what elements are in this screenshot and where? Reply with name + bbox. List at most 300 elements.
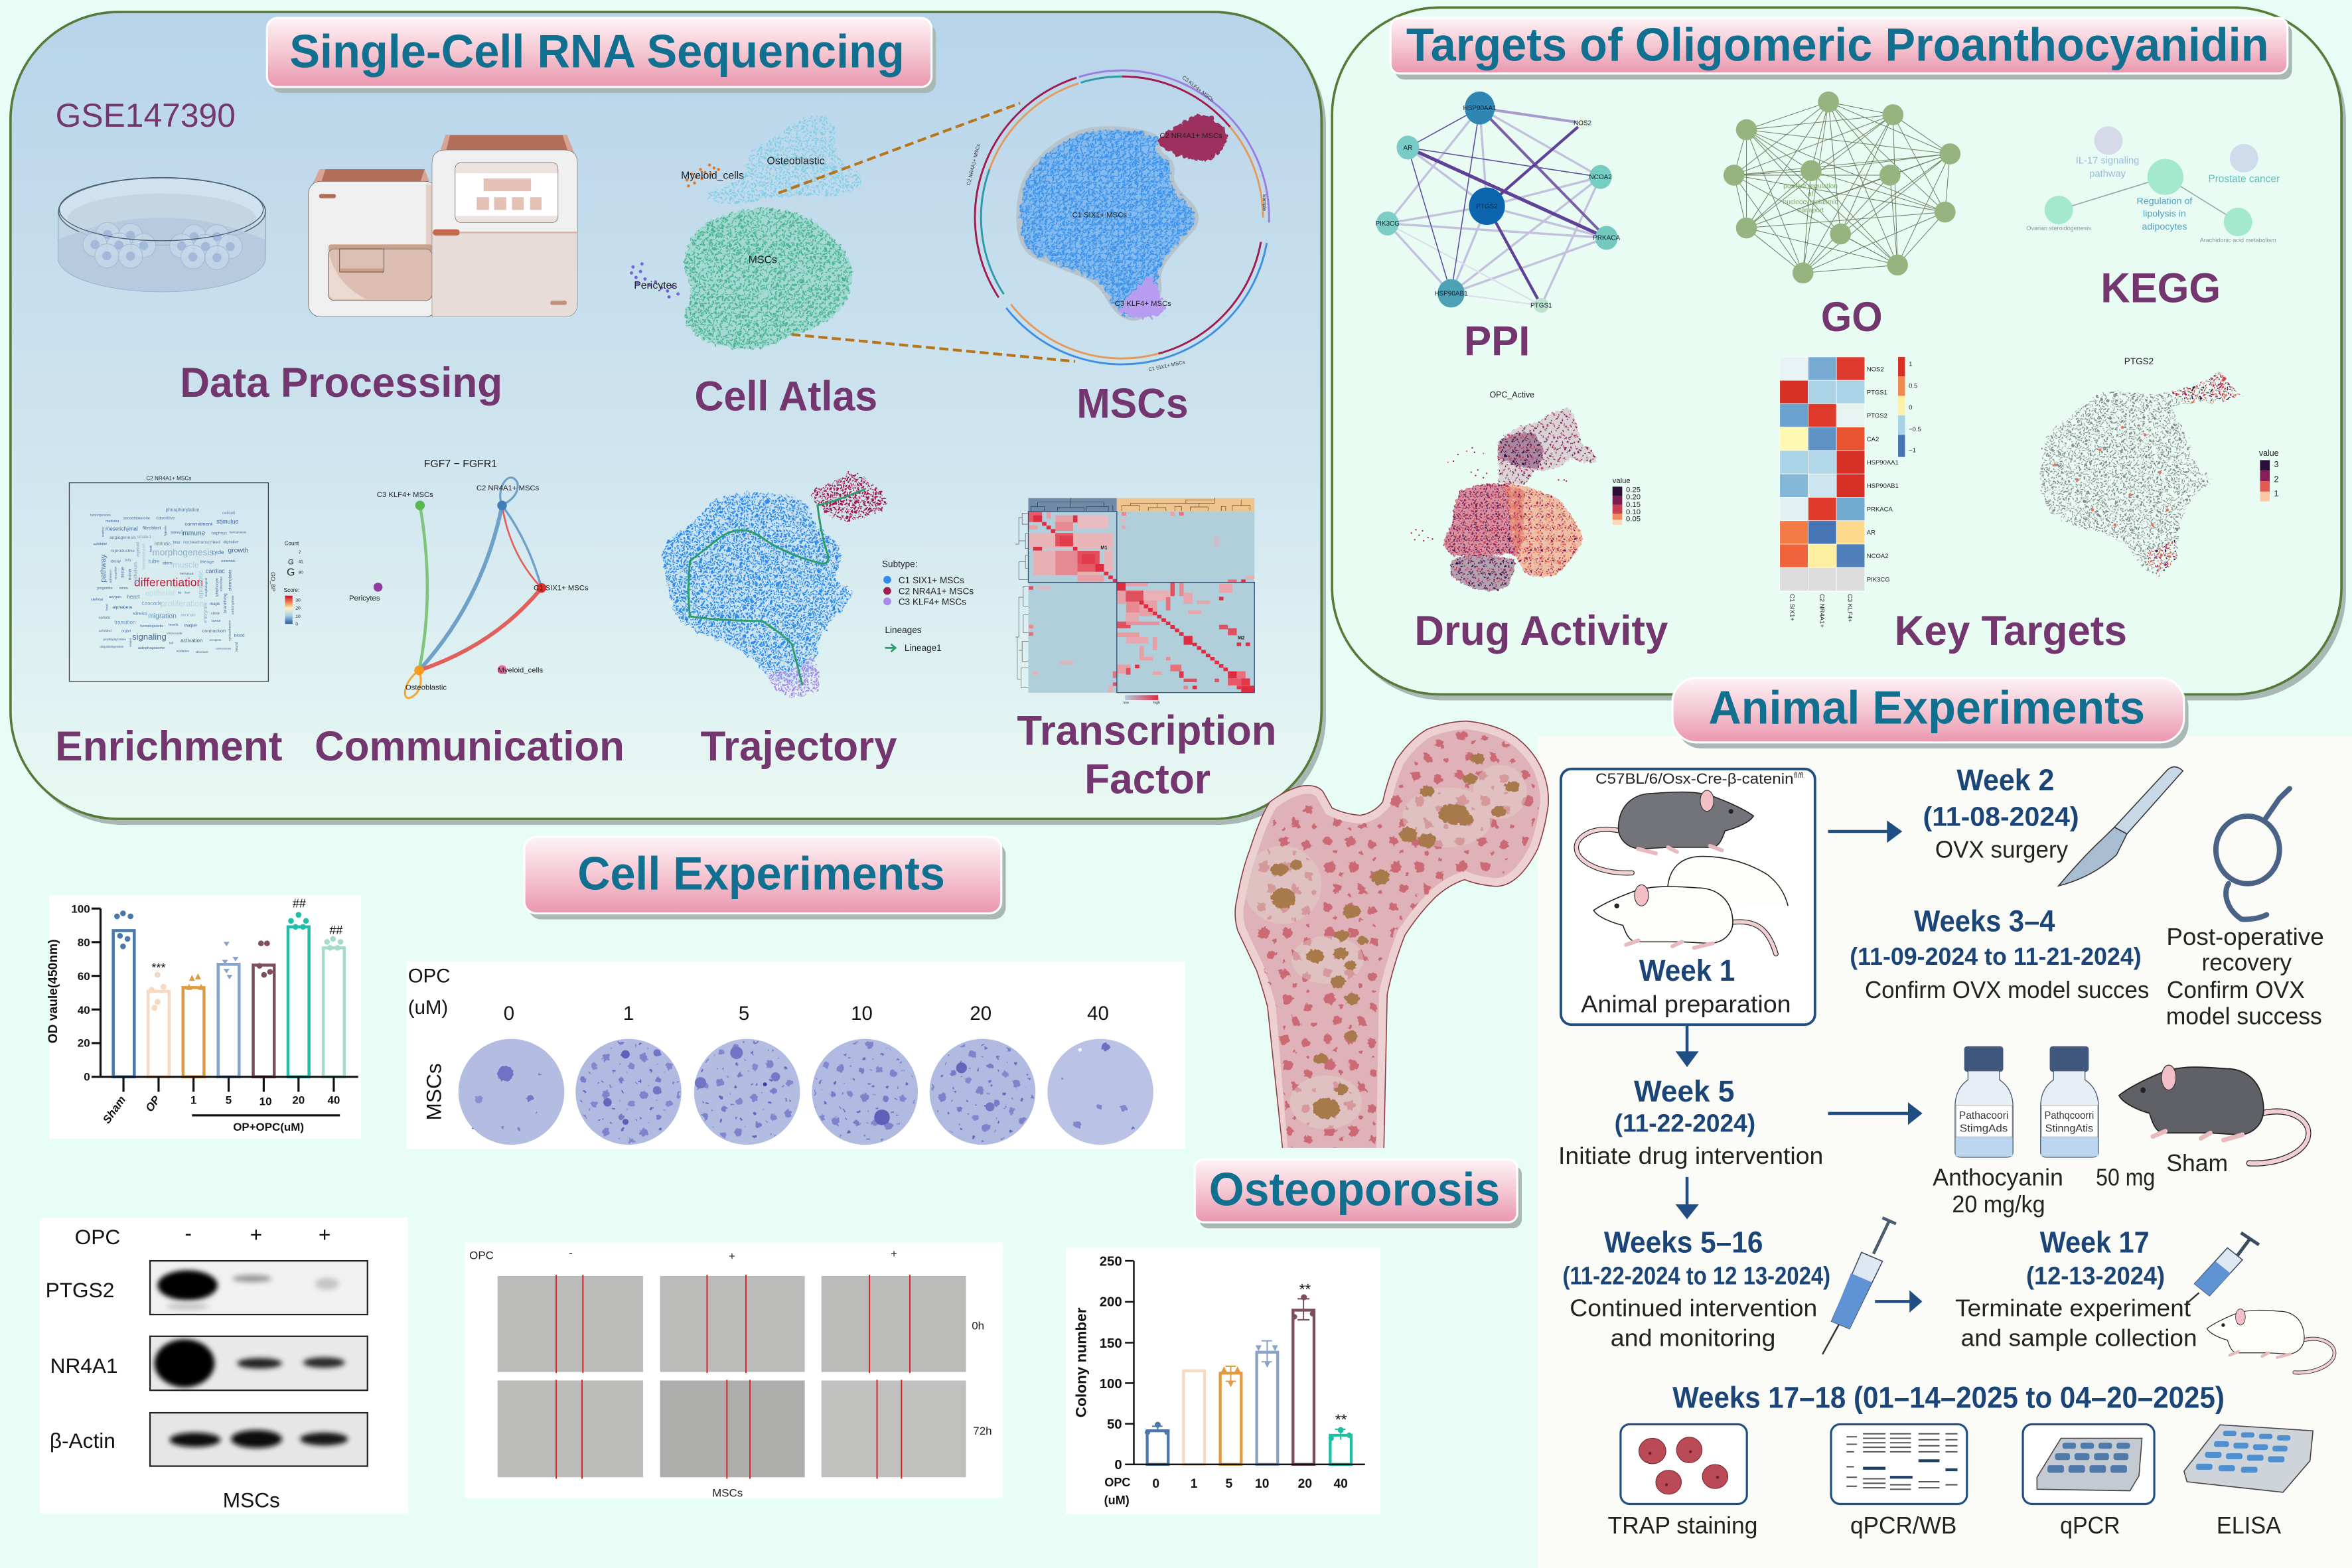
chart: cell atlas UMAP: Pericytes (634, 280, 677, 291)
chart: wound healing scratch assay: + (729, 1250, 735, 1263)
legend: PTGS2 value: 2 (2274, 475, 2278, 484)
label: Transcription Factor: Factor (1084, 756, 1211, 803)
panel: single-cell RNA sequencing (11, 12, 1326, 825)
chart: PTGS2 expression UMAP: PTGS2 (2124, 356, 2154, 366)
chart: enrichment word cloud (69, 475, 303, 681)
text: week 2: OVX surgery (1935, 835, 2068, 863)
text: week 5: Initiate drug intervention (1558, 1142, 1823, 1169)
chart: enrichment word cloud: striated (137, 535, 151, 539)
chart: OD value bar chart: *** (151, 962, 165, 975)
chart: enrichment word cloud: heart (127, 593, 140, 600)
chart: enrichment word cloud: nitroxoxide (167, 632, 183, 636)
M1 module cells (1029, 512, 1117, 583)
chart: KEGG network: Regulation of (2137, 196, 2192, 206)
panel: week 1 animal preparation: C57BL/6/Osx-Cre-β-catenin (1595, 770, 1794, 787)
chart: enrichment word cloud: thalper (184, 624, 197, 628)
chart: key targets expression heatmap: C2 NR4A1+ (1818, 594, 1826, 628)
chart: enrichment word cloud: muscle (173, 560, 199, 569)
chart: western blot: + (319, 1222, 331, 1246)
arrow: week 5 to weeks 5-16 (1678, 1177, 1696, 1217)
chart: enrichment word cloud: celicell (222, 511, 235, 516)
chart: OD value bar chart: 60 (78, 970, 90, 983)
legend: enrichment count and score: 20 (295, 606, 301, 611)
chart: OD value bar chart: OD vaule(450nm) (46, 940, 60, 1043)
icon: gray rat (1576, 790, 1753, 873)
chart: enrichment word cloud: digestive (224, 540, 239, 544)
icon: drug bottle 2: StinngAtis (2045, 1123, 2093, 1134)
chart: enrichment word cloud: levels (169, 623, 179, 627)
text: weeks 5-16: (11-22-2024 to 12 13-2024) (1562, 1262, 1830, 1291)
legend: subtype and lineages: Lineage1 (905, 643, 942, 653)
icon: sequencing instrument (309, 135, 577, 317)
chart: OD value bar chart: OP (143, 1094, 163, 1114)
text: dose labels (1933, 1149, 2228, 1218)
chart: key targets expression heatmap: NOS2 (1867, 366, 1884, 373)
chart: transcription factor heatmap: M1 (1100, 545, 1108, 551)
off-diagonal cells (1029, 512, 1254, 692)
chart: FGF7-FGFR1 communication network: C1 SIX1+ MSCs (534, 584, 589, 592)
legend: enrichment count and score: Score: (284, 587, 299, 593)
icon: femur with osteoporotic lesions (1235, 721, 1548, 1185)
chart: enrichment word cloud: osmotic (99, 616, 111, 620)
chart: enrichment word cloud: transition (114, 620, 135, 626)
chart: transcription factor heatmap: high (1153, 701, 1160, 705)
chart: colony number bar chart: ** (1335, 1411, 1347, 1428)
chart: PPI network: PTGS2 (1476, 203, 1498, 210)
label: PPI: PPI (1464, 319, 1530, 365)
chart: enrichment word cloud: contraction (202, 628, 226, 634)
chart: enrichment word cloud: nucleartranscribed (183, 540, 220, 545)
chart: enrichment word cloud: focal (105, 604, 108, 610)
chart: enrichment word cloud: reproductive (111, 549, 135, 553)
chart: enrichment word cloud: extensic (221, 559, 236, 563)
legend: PTGS2 value (2259, 449, 2279, 502)
chart: MSC subclusters circular plot: C3 KLF4+ MSCs (1115, 300, 1171, 308)
chart: enrichment word cloud: tube (149, 558, 159, 565)
chart: OD value bar chart: 0 (84, 1070, 90, 1083)
chart: colony formation plates: 0 (504, 1003, 514, 1025)
text: weeks 5-16: Weeks 5–16 (1604, 1226, 1763, 1259)
panel: week 1 animal preparation (1561, 769, 1815, 1025)
chart: enrichment word cloud: fat (178, 591, 182, 595)
icon: ELISA plate: ELISA (2217, 1512, 2282, 1539)
text: week 17 (1955, 1226, 2197, 1351)
legend: drug activity value: 0.25 (1626, 486, 1641, 494)
plate 20 uM (923, 1033, 1041, 1151)
plate 0 uM (459, 1039, 564, 1145)
chart: key targets expression heatmap: PIK3CG (1867, 576, 1890, 583)
legend: enrichment count and score: 41 (299, 560, 303, 565)
chart: trajectory UMAP with lineage (662, 472, 974, 697)
chart: OD value bar chart: 40 (78, 1004, 90, 1017)
chart: enrichment word cloud: embryonic (203, 602, 208, 623)
legend: enrichment count and score: 30 (295, 598, 301, 603)
chart: colony number bar chart: 1 (1191, 1477, 1198, 1491)
text: week 2: Week 2 (1956, 763, 2054, 797)
chart: enrichment word cloud: receptors (209, 638, 221, 642)
chart: MSC subclusters circular plot (966, 70, 1269, 373)
M2 module cells (1118, 583, 1254, 692)
text: weeks 3-4: Weeks 3–4 (1914, 904, 2055, 938)
chart: MSC subclusters circular plot: C2 NR4A1+ MSCs (1159, 132, 1222, 140)
chart: cell atlas UMAP (630, 115, 864, 349)
arrow: weeks 5-16 to week 17 (1875, 1293, 1920, 1309)
chart: FGF7-FGFR1 communication network: C3 KLF4+ MSCs (377, 491, 433, 499)
chart: enrichment word cloud: lymphocyte (215, 578, 219, 597)
heading: Animal Experiments: Animal Experiments (1708, 681, 2145, 733)
chart: enrichment word cloud: circadian (113, 566, 117, 579)
chart: western blot: MSCs (223, 1488, 280, 1512)
chart: enrichment word cloud: kidney (171, 531, 181, 535)
chart: western blot: - (184, 1221, 192, 1245)
text: week 2 (1923, 763, 2079, 863)
chart: enrichment word cloud: neural (235, 642, 239, 652)
text: post-operative recovery (2166, 923, 2324, 1030)
legend: enrichment count and score: 0 (295, 622, 298, 626)
label: Transcription Factor: Transcription (1017, 707, 1276, 754)
legend: PTGS2 value: 3 (2274, 460, 2278, 469)
chart: enrichment word cloud: oxygen (109, 595, 121, 599)
plate 10 uM (792, 1021, 936, 1165)
chart: OD value bar chart: 1 (190, 1094, 196, 1106)
chart: key targets expression heatmap: NCOA2 (1867, 553, 1888, 560)
chart: enrichment word cloud: necrosis (181, 613, 195, 617)
chart: PPI network (1375, 92, 1620, 313)
chart: OD value bar chart: 100 (71, 902, 90, 915)
chart: colony formation plates: 20 (970, 1003, 992, 1025)
chart: colony number bar chart: 250 (1100, 1255, 1122, 1269)
chart: key targets expression heatmap: CA2 (1867, 436, 1879, 443)
chart: enrichment word cloud: mediator (106, 520, 119, 524)
label: MSCs: MSCs (1076, 381, 1189, 427)
chart: wound healing scratch assay: 72h (973, 1425, 992, 1437)
chart: OD value bar chart: 20 (78, 1037, 90, 1050)
icon: syringe right (2187, 1233, 2259, 1303)
icon: drug bottle 2: Pathqcoorri (2045, 1110, 2094, 1121)
chart: transcription factor heatmap (1015, 498, 1254, 705)
chart: KEGG network: Prostate cancer (2208, 174, 2280, 185)
plate 5 uM (679, 1024, 815, 1160)
chart: western blot: PTGS2 (46, 1278, 114, 1302)
chart: key targets expression heatmap: AR (1867, 530, 1875, 537)
arrow: zoom lines from atlas to MSCs (778, 103, 1075, 362)
chart: KEGG network: IL-17 signaling (2076, 155, 2139, 166)
text: weeks 3-4: Confirm OVX model succes (1865, 976, 2149, 1003)
chart: enrichment word cloud: myeloid (135, 542, 140, 557)
chart: enrichment word cloud: tumorigenesis (90, 513, 111, 517)
legend: enrichment count and score: 2 (299, 550, 301, 555)
legend: subtype and lineages: Subtype: (882, 559, 917, 569)
text: dose labels: 20 mg/kg (1952, 1190, 2045, 1218)
chart: enrichment word cloud: morphological (204, 578, 208, 597)
chart: enrichment word cloud: lineage (200, 559, 214, 564)
chart: enrichment word cloud: cytokine (94, 542, 107, 546)
chart: FGF7-FGFR1 communication network: Pericytes (349, 595, 380, 603)
chart: enrichment word cloud: stimulus (216, 518, 239, 525)
chart: enrichment word cloud: epithelial (145, 590, 175, 598)
text: post-operative recovery: model success (2166, 1003, 2322, 1030)
chart: enrichment word cloud: phosphorylation (166, 506, 200, 512)
legend: enrichment count and score (270, 541, 303, 626)
chart: enrichment word cloud: cascade (141, 600, 163, 606)
chart: colony number bar chart: 0 (1152, 1477, 1159, 1491)
chart: PPI network: NCOA2 (1589, 174, 1612, 181)
chart: enrichment word cloud: epithelium (132, 562, 138, 584)
chart: colony number bar chart: 50 (1107, 1417, 1122, 1432)
text: week 5 (1558, 1074, 1823, 1169)
chart: enrichment word cloud: cdpositive (156, 516, 175, 521)
chart: colony number bar chart: OPC (1104, 1476, 1130, 1489)
label: Cell Atlas: Cell Atlas (694, 374, 877, 420)
chart: enrichment word cloud: streamstrated (141, 543, 146, 569)
chart: OD value bar chart: 20 (292, 1094, 305, 1106)
chart: enrichment word cloud: oxidative (177, 650, 189, 654)
text: week 17: and sample collection (1961, 1324, 2197, 1351)
text: post-operative recovery: Post-operative (2166, 923, 2324, 950)
label: Drug Activity: Drug Activity (1414, 608, 1668, 654)
chart: colony number bar chart: 5 (1225, 1477, 1232, 1491)
label: Trajectory: Trajectory (701, 723, 897, 770)
legend: drug activity value: 0.05 (1626, 515, 1641, 523)
text: weeks 3-4: (11-09-2024 to 11-21-2024) (1850, 942, 2142, 970)
text: weeks 5-16 (1562, 1226, 1830, 1351)
chart: enrichment word cloud: tumor (212, 619, 221, 623)
plate 1 uM (575, 1039, 682, 1145)
panel: animal experiments background (1538, 737, 2352, 1568)
icon: drug bottle 1 (1955, 1046, 2013, 1157)
text: week 5: Week 5 (1634, 1074, 1734, 1108)
icon: petri dish with cells (58, 178, 265, 292)
text: post-operative recovery: Confirm OVX (2167, 976, 2305, 1003)
chart: OD value bar chart: Sham (100, 1094, 128, 1126)
chart: enrichment word cloud: unfolded (99, 629, 111, 633)
chart: drug activity UMAP: OPC_Active (1489, 390, 1534, 399)
chart: colony number bar chart: ** (1299, 1281, 1311, 1298)
chart: western blot: NR4A1 (50, 1354, 118, 1378)
label: Communication: Communication (315, 723, 625, 770)
blot: PTGS2 (150, 1261, 368, 1315)
chart: drug activity UMAP (1411, 390, 1641, 591)
chart: enrichment word cloud: cardiac (206, 568, 225, 575)
chart: enrichment word cloud: nephron (211, 532, 227, 536)
chart: PPI network: PRKACA (1593, 235, 1620, 242)
icon: qPCR/WB gel: qPCR/WB (1850, 1512, 1956, 1539)
chart: enrichment word cloud: nervous (180, 572, 193, 576)
chart: enrichment word cloud: organ (121, 629, 131, 633)
label: Week 1: Week 1 (1639, 954, 1735, 987)
chart: KEGG network: Ovarian steroidogenesis (2026, 225, 2091, 232)
chart: enrichment word cloud: immune (181, 530, 206, 537)
legend: PTGS2 value: 1 (2274, 489, 2278, 498)
legend: subtype and lineages: C2 NR4A1+ MSCs (899, 586, 974, 596)
chart: KEGG network: adipocytes (2142, 222, 2187, 232)
chart: enrichment word cloud: progenitor (97, 587, 113, 591)
icon: qPCR/WB gel (1831, 1424, 1967, 1539)
chart: enrichment word cloud: mirna (128, 569, 133, 580)
chart: colony number bar chart (1066, 1247, 1380, 1514)
chart: enrichment word cloud: osteoblast (219, 576, 223, 591)
text: week 17: (12-13-2024) (2026, 1262, 2165, 1291)
text: weeks 5-16: Continued intervention (1570, 1295, 1817, 1322)
legend: drug activity value: value (1613, 477, 1631, 485)
chart: enrichment word cloud: poly (125, 559, 131, 563)
chart: enrichment word cloud: hypoxia (164, 526, 167, 536)
chart: MSC subclusters circular plot: C2 NR4A1+ MSCs (966, 143, 982, 186)
chart: colony formation plates: 5 (739, 1003, 749, 1025)
chart: OD value bar chart: 80 (78, 936, 90, 949)
chart: GO network: transport (1797, 207, 1824, 214)
chart: KEGG network: pathway (2089, 169, 2126, 180)
legend: enrichment count and score: Count (285, 541, 299, 547)
arrow: week 5 to drugs (1828, 1105, 1920, 1122)
chart: GO network: positive regulation (1783, 183, 1838, 190)
chart: FGF7-FGFR1 communication network (349, 459, 589, 698)
text: week 17: Week 17 (2040, 1226, 2150, 1259)
legend: enrichment count and score: G (287, 567, 295, 578)
icon: scalpel (2059, 767, 2183, 886)
chart: MSC subclusters circular plot: C3 KLF4+ MSCs (1181, 74, 1215, 103)
label: Data Processing: Data Processing (180, 360, 502, 406)
chart: FGF7-FGFR1 communication network: FGF7 − FGFR1 (424, 459, 497, 470)
chart: enrichment word cloud: sensethmorone (123, 517, 150, 521)
legend: heatmap colour scale: 0.5 (1909, 382, 1917, 390)
chart: enrichment word cloud: liver (184, 591, 190, 594)
chart: enrichment word cloud: intrinsic (155, 540, 171, 546)
chart: FGF7-FGFR1 communication network: C2 NR4A1+ MSCs (477, 484, 540, 492)
chart: PTGS2 expression UMAP (2040, 356, 2279, 576)
chart: colony formation plates: 40 (1087, 1003, 1109, 1025)
chart: key targets expression heatmap: HSP90AB1 (1867, 482, 1899, 490)
chart: enrichment word cloud: fibroblast (143, 526, 161, 531)
chart: OD value bar chart: ## (293, 896, 306, 910)
heading: Single-Cell RNA Sequencing: Single-Cell RNA Sequencing (289, 26, 905, 78)
heading: Osteoporosis (1195, 1159, 1522, 1228)
chart: enrichment word cloud: cycloadhesion (228, 620, 232, 641)
chart: wound healing scratch assay: + (891, 1247, 897, 1260)
legend: heatmap colour scale: 1 (1909, 360, 1912, 368)
chart: key targets expression heatmap: PTGS2 (1867, 412, 1887, 419)
text: week 5: (11-22-2024) (1615, 1109, 1755, 1137)
chart: enrichment word cloud: C2 NR4A1+ MSCs (146, 475, 191, 481)
text: week 2: (11-08-2024) (1923, 801, 2079, 831)
chart: key targets expression heatmap: C1 SIX1+ (1789, 594, 1796, 621)
chart: GO network: of (1808, 191, 1813, 198)
chart: enrichment word cloud: autophagosome (138, 646, 165, 650)
icon: white rat behind (1668, 857, 1788, 906)
chart: OD value bar chart: 10 (259, 1096, 272, 1108)
chart: colony number bar chart: 200 (1100, 1295, 1122, 1310)
chart: enrichment word cloud: cycle (212, 549, 224, 555)
chart: enrichment word cloud: growth (228, 547, 249, 554)
legend: subtype and lineages (882, 559, 974, 653)
chart: PPI network: PTGS1 (1530, 302, 1552, 309)
chart: cell atlas UMAP: Osteoblastic (767, 155, 825, 167)
chart: KEGG network: Arachidonic acid metabolism (2200, 237, 2276, 244)
chart: wound healing scratch assay: - (569, 1247, 573, 1259)
chart: OD value bar chart: ## (329, 924, 342, 937)
chart: OD value bar chart: 40 (327, 1094, 340, 1106)
heading: Animal Experiments (1672, 678, 2189, 748)
chart: colony number bar chart: Colony number (1072, 1307, 1089, 1417)
chart: enrichment word cloud: adhesion (109, 569, 113, 583)
chart: western blot: + (250, 1222, 262, 1246)
chart: key targets expression heatmap: PRKACA (1867, 506, 1893, 514)
chart: colony number bar chart: 10 (1255, 1477, 1269, 1491)
chart: enrichment word cloud: mesenchymal (106, 526, 138, 532)
chart: enrichment word cloud: angiogenesis (110, 535, 136, 540)
chart: enrichment word cloud: stress (133, 610, 147, 616)
chart: wound healing scratch assay: 0h (972, 1320, 984, 1332)
chart: enrichment word cloud: proliferation (160, 599, 204, 608)
icon: drug bottle 1: StimgAds (1960, 1123, 2008, 1134)
chart: PPI network: AR (1404, 145, 1412, 152)
chart: enrichment word cloud: ubiquitindependent (100, 645, 124, 648)
arrow: week 1 to week 5 (1678, 1026, 1696, 1064)
chart: enrichment word cloud: signaling (132, 632, 167, 642)
icon: gray sham rat (2119, 1065, 2308, 1163)
chart: enrichment word cloud: peptidyltyrosine (103, 638, 126, 642)
heading: Targets of Oligomeric Proanthocyanidin: Targets of Oligomeric Proanthocyanidin (1406, 19, 2269, 71)
chart: key targets expression heatmap (1780, 357, 1921, 628)
text: dose labels: Sham (2166, 1149, 2228, 1176)
chart: enrichment word cloud: vessel (129, 638, 132, 647)
chart: KEGG network: lipolysis in (2143, 209, 2186, 220)
chart: enrichment word cloud: differentiation (134, 576, 203, 589)
icon: qPCR plate (2023, 1424, 2154, 1539)
chart: enrichment word cloud: alphabeta (112, 605, 132, 610)
arrow: week 1 to week 2 (1828, 823, 1900, 840)
chart: enrichment word cloud: brain (149, 545, 153, 552)
chart: enrichment word cloud: stem (163, 561, 173, 565)
legend: drug activity value: 0.10 (1626, 508, 1641, 516)
legend: subtype and lineages: C1 SIX1+ MSCs (899, 575, 964, 585)
chart: western blot: OPC (75, 1225, 120, 1249)
legend: subtype and lineages: Lineages (885, 625, 922, 635)
blot: beta-actin (150, 1413, 368, 1466)
chart: enrichment word cloud: chemotaxis (228, 569, 232, 591)
chart: FGF7-FGFR1 communication network: Myeloid_cells (498, 667, 544, 675)
chart: colony number bar chart: 20 (1298, 1477, 1312, 1491)
chart: enrichment word cloud: hemopoiesis (230, 530, 247, 534)
chart: enrichment word cloud: branching (223, 593, 228, 613)
chart: wound healing scratch assay: MSCs (712, 1487, 743, 1500)
chart: colony number bar chart: 40 (1333, 1477, 1348, 1491)
chart: enrichment word cloud: activation (181, 638, 202, 644)
chart: OD value bar chart: 5 (226, 1094, 232, 1106)
chart: enrichment word cloud: carbohydrate (231, 595, 235, 614)
icon: white rat end of experiment (2207, 1309, 2335, 1372)
chart: OD value bar chart: OP+OPC(uM) (233, 1121, 304, 1133)
icon: TRAP staining (1607, 1424, 1757, 1539)
chart: colony number bar chart: 100 (1100, 1377, 1122, 1391)
chart: enrichment word cloud: bmp (173, 541, 181, 545)
chart: cell atlas UMAP: Myeloid_cells (681, 170, 744, 181)
chart: western blot (40, 1218, 408, 1514)
chart: enrichment word cloud: cardiovascular (216, 648, 232, 650)
chart: enrichment word cloud: apoptotic (197, 571, 204, 599)
icon: drug bottle 1: Pathacoori (1959, 1110, 2008, 1121)
text: dose labels: Anthocyanin (1933, 1164, 2063, 1191)
icon: white rat front (1593, 885, 1776, 954)
chart: colony number bar chart: 150 (1100, 1336, 1122, 1351)
chart: enrichment word cloud: decay (110, 559, 121, 563)
chart: transcription factor heatmap: low (1124, 701, 1130, 705)
legend: drug activity value (1613, 477, 1641, 525)
label: KEGG: KEGG (2100, 265, 2221, 311)
chart: cell atlas UMAP: MSCs (749, 255, 777, 266)
chart: colony formation plates: MSCs (422, 1063, 446, 1120)
chart: wound healing scratch assay: OPC (469, 1249, 494, 1261)
